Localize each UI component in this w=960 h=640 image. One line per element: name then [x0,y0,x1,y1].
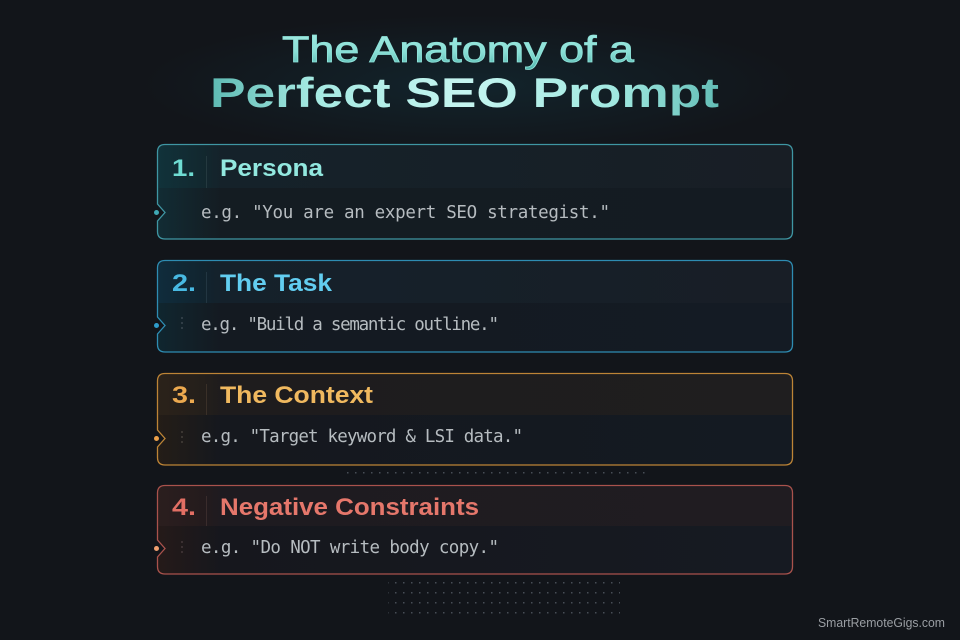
panel: negative constraints [154,486,792,574]
title [210,29,719,116]
number: 4. [172,494,196,521]
icon: connector dot [154,210,159,215]
watermark: SmartRemoteGigs.com [818,616,945,630]
number: 1. [172,155,195,182]
example text: e.g. "Do NOT write body copy." [201,538,499,558]
panel: the context [154,374,792,465]
panel: the task [154,260,792,352]
dotted marker [181,431,183,445]
dotted marker [181,317,183,331]
example text: e.g. "Build a semantic outline." [201,315,499,335]
title line 2: Perfect SEO Prompt [210,69,719,116]
icon: connector dot [154,323,159,328]
heading: Negative Constraints [220,494,479,521]
heading: The Context [220,382,373,409]
heading: The Task [220,270,333,297]
icon: connector dot [154,546,159,551]
dotted marker [181,541,183,555]
number: 3. [172,382,196,409]
heading: Persona [220,155,324,182]
title line 1: The Anatomy of a [282,29,634,70]
example text: e.g. "Target keyword & LSI data." [201,427,523,447]
example text: e.g. "You are an expert SEO strategist." [201,203,610,223]
icon: connector dot [154,436,159,441]
panel: persona [154,144,792,239]
number: 2. [172,270,196,297]
